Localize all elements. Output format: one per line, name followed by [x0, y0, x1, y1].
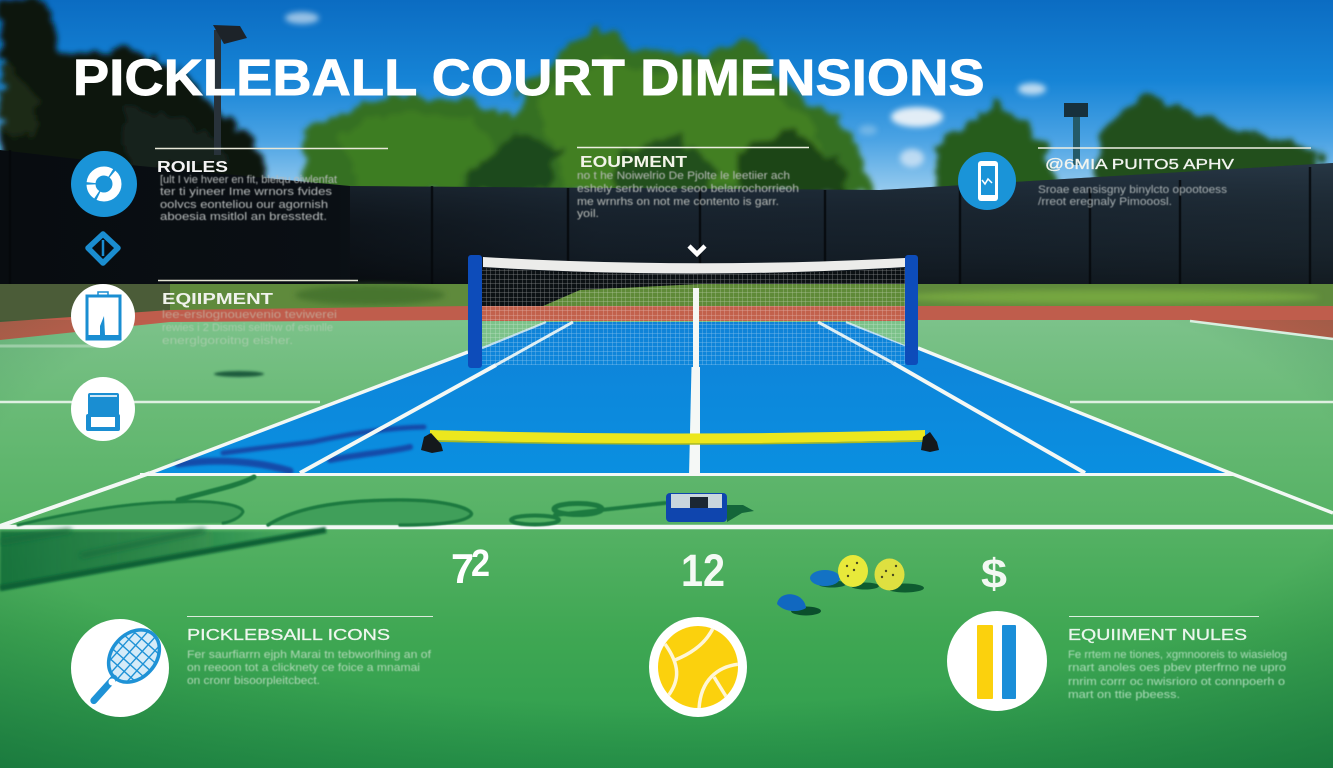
heading: pickleball icons: PICKLEBSAlLL ICONS: [187, 627, 390, 644]
icon: tablet case: [71, 377, 135, 441]
text block: pickleball icons: [187, 649, 432, 687]
text block: equipment left: [162, 309, 337, 347]
text block: equipment center: no t he Noiwelrio De Pjolte le leetiier ach: [577, 170, 790, 182]
text block: media photography: /rreot eregnaly Pimooosl.: [1038, 196, 1172, 208]
icon: phone badge: [958, 152, 1016, 210]
text block: equipment left: energlgoroitng eisher.: [162, 335, 293, 347]
background: fence: [0, 150, 1333, 315]
icon: paddle: [71, 617, 173, 717]
text block: equipment left: rewies i 2 Dismsi sellthw of esnnlle: [162, 322, 333, 334]
background: sky: [0, 0, 1333, 200]
text block: roles: [ult I vie hveer en fit, blelqu oiwlenfat: [160, 174, 337, 186]
left post: [468, 255, 482, 368]
text block: media photography: Sroae eansisgny binylcto opootoess: [1038, 184, 1228, 196]
text block: roles: aboesia msitlol an bresstedt.: [160, 211, 327, 223]
text block: equipment rules: [1068, 649, 1287, 701]
text block: equipment center: eshely serbr wioce seoo belarrochorrieoh: [577, 183, 799, 195]
court lines: [0, 322, 1333, 527]
number: dollar sign: $: [981, 550, 1007, 597]
text block: roles: oolvcs eonteliou our agornish: [160, 199, 328, 211]
heading: equipment left: EQIIPMENT: [162, 291, 273, 308]
heading: media photography: @6MIA PUITO5 APHV: [1045, 157, 1234, 173]
panel: pickleball icons: [71, 616, 433, 717]
icon: yellow ball: [649, 617, 747, 717]
icon: roles badge: [71, 151, 137, 217]
heading: roles: ROILES: [157, 159, 228, 176]
background: trees: [0, 0, 1322, 195]
icon: chevron: [689, 246, 705, 254]
court surface: [0, 320, 1333, 768]
text block: equipment rules: rnrim corrr oc nwisrioro ot connpoerh o: [1068, 676, 1285, 688]
heading: equipment center: EOUPMENT: [580, 154, 687, 171]
yellow bar equipment: [421, 430, 939, 453]
text block: media photography: [1038, 184, 1228, 208]
court shadows on grass: [18, 477, 665, 525]
number: 72: [451, 543, 490, 592]
panel: equipment left: [71, 280, 358, 348]
text block: pickleball icons: on cronr bisoorpleitcbect.: [187, 675, 320, 687]
text block: equipment center: yoil.: [577, 208, 599, 220]
text block: equipment rules: rnart anoles oes pbev pterfrno ne upro: [1068, 662, 1286, 674]
text block: equipment center: [577, 170, 799, 220]
text block: pickleball icons: Fer saurfiarrn ejph Marai tn tebworlhing an of: [187, 649, 432, 661]
text block: pickleball icons: on reeoon tot a clicknety ce foice a mnamai: [187, 662, 420, 674]
icon: diamond marker: [88, 234, 118, 263]
number: 72: 7: [451, 545, 474, 592]
background: hedge and surround: [0, 284, 1333, 345]
net top band: [483, 257, 905, 274]
heading: equipment rules: EQUIIMENT NULES: [1068, 627, 1247, 644]
panel: equipment rules: [947, 611, 1287, 711]
balls and discs: [777, 555, 924, 616]
panel: equipment center: [577, 148, 809, 220]
net: [468, 255, 918, 368]
title: PICKLEBALL COURT DIMENSIONS: [73, 49, 985, 107]
panel: roles: [71, 148, 388, 223]
right post: [905, 255, 918, 365]
text block: roles: [160, 174, 337, 223]
text block: equipment rules: mart on ttie pbeess.: [1068, 689, 1180, 701]
text block: equipment left: lee-erslognouevenio teviwerei: [162, 309, 337, 321]
text block: equipment rules: Fe rrtem ne tiones, xgmnooreis to wiasielog: [1068, 649, 1287, 661]
icon: equipment board: [71, 284, 135, 348]
background: light poles: [213, 25, 1088, 165]
background: clouds: [285, 12, 1046, 167]
number: 12: 12: [681, 545, 725, 596]
lower court shadow: [0, 530, 326, 590]
court shadows on blue: [178, 427, 424, 471]
icon: rule bars: [947, 611, 1047, 711]
panel: media photography: [958, 148, 1311, 210]
device on court: [666, 493, 754, 522]
text block: roles: ter ti yineer Ime wrnors fvides: [160, 186, 333, 198]
text block: equipment center: me wrnrhs on not me contento is garr.: [577, 196, 779, 208]
net mesh: [482, 268, 905, 367]
blue playing court: [0, 322, 1333, 527]
number: 72: 2: [471, 543, 490, 585]
